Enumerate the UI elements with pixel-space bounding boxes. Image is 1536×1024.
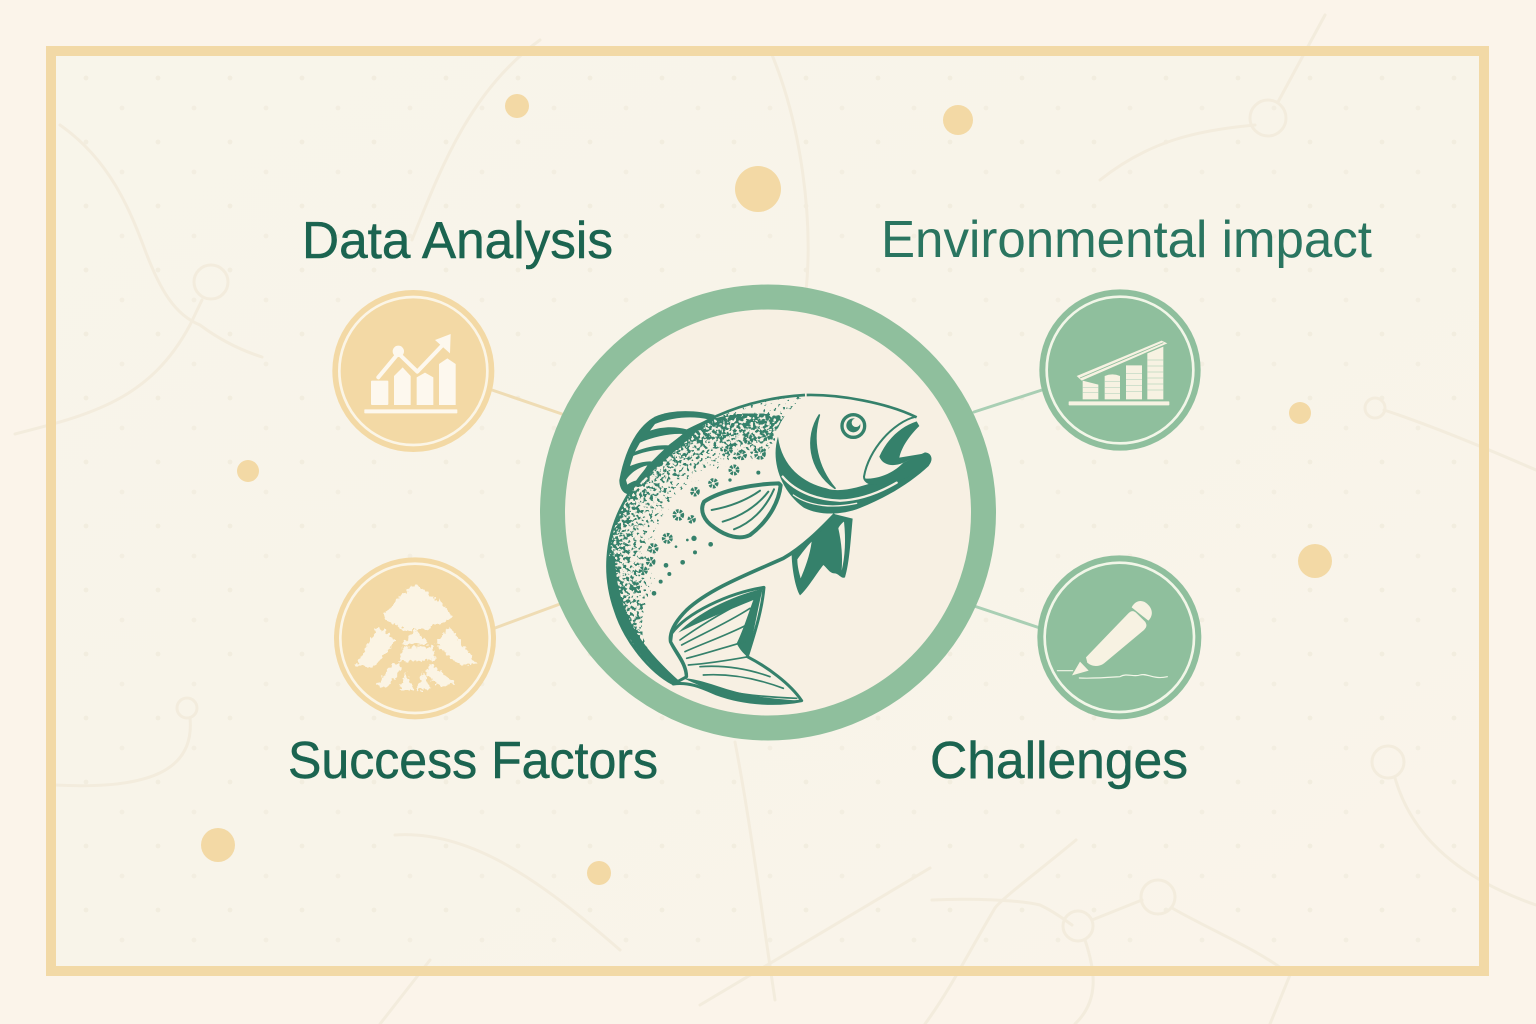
jaw and gill band	[776, 437, 929, 514]
heading: Environmental impact: Environmental impact	[881, 211, 1373, 269]
icon: leaping fish	[607, 394, 932, 703]
heading: Challenges: Challenges	[930, 732, 1188, 790]
bar chart	[364, 358, 457, 413]
central circle	[552, 297, 984, 728]
tail fin	[671, 587, 802, 703]
trend arrow	[378, 345, 443, 377]
badge disc	[1037, 555, 1201, 719]
badge disc	[332, 290, 494, 452]
connector lines	[492, 390, 1042, 628]
eye	[842, 415, 865, 437]
icon: success factors badge	[334, 557, 496, 719]
decorative dots	[201, 94, 1332, 885]
mouth	[879, 421, 925, 465]
lower jaw	[864, 452, 932, 485]
icon: challenges badge	[1037, 555, 1201, 719]
pencil	[1086, 611, 1146, 666]
written line	[1057, 671, 1167, 678]
ventral fin	[792, 514, 853, 595]
spot clusters	[632, 432, 769, 590]
lip outline	[864, 417, 916, 484]
badge disc	[334, 557, 496, 719]
cheek line	[811, 415, 835, 488]
dorsal fin	[619, 411, 715, 494]
heading: Data Analysis: Data Analysis	[302, 212, 613, 270]
stacked bars	[1069, 341, 1169, 405]
back and belly edge	[607, 395, 805, 684]
icon: environmental impact badge	[1039, 289, 1201, 451]
icon: data analysis badge	[332, 290, 494, 452]
heading: Success Factors: Success Factors	[288, 732, 658, 790]
pectoral fin	[702, 483, 781, 537]
speckled back	[607, 395, 805, 684]
pile of fragments	[355, 585, 477, 690]
badge disc	[1039, 289, 1201, 451]
fish body silhouette	[607, 394, 917, 684]
belly line	[670, 514, 835, 678]
